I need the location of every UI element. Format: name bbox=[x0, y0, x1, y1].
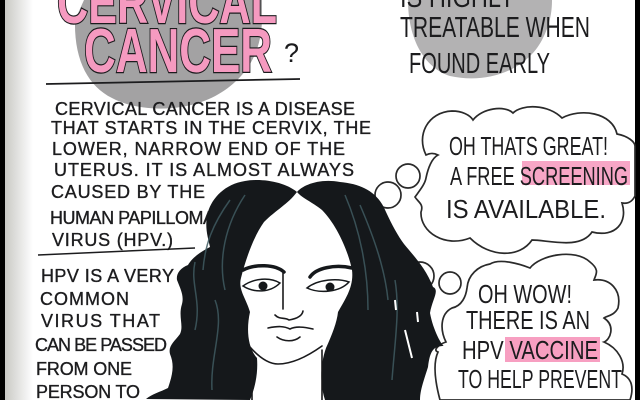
text block: hpv explanation: FROM ONE bbox=[36, 359, 132, 379]
section divider bbox=[38, 248, 195, 255]
callout: treatable when found early bbox=[400, 0, 590, 80]
thought dots: first bubble bbox=[375, 164, 420, 208]
eye: left bbox=[243, 279, 280, 291]
left page edge bbox=[0, 0, 5, 400]
heading underline bbox=[46, 79, 300, 84]
thought bubble: hpv vaccine bbox=[435, 254, 632, 400]
face outline bbox=[250, 346, 322, 400]
highlight: screening bbox=[522, 161, 630, 185]
text block: cervical cancer definition: CAUSED BY THE bbox=[51, 182, 205, 202]
grey callout blob bbox=[408, 0, 552, 78]
nose bbox=[275, 273, 303, 320]
hair bbox=[146, 180, 444, 400]
text block: cervical cancer definition: UTERUS. IT IS ALMOST ALWAYS bbox=[54, 160, 354, 180]
callout: treatable when found early: FOUND EARLY bbox=[409, 48, 550, 80]
question mark: ? bbox=[284, 38, 299, 68]
eyebrow: right bbox=[310, 266, 352, 277]
text block: cervical cancer definition: THAT STARTS IN THE CERVIX, THE bbox=[51, 118, 371, 138]
text block: hpv explanation: COMMON bbox=[40, 289, 129, 309]
text block: cervical cancer definition: LOWER, NARROW END OF THE bbox=[52, 139, 345, 159]
heading: what is cervical cancer bbox=[57, 0, 299, 109]
highlight: vaccine bbox=[505, 337, 600, 362]
illustration: woman with long black hair bbox=[146, 180, 444, 400]
text block: cervical cancer definition: CERVICAL CANCER IS A DISEASE bbox=[55, 99, 355, 119]
title word: cancer: CANCER bbox=[84, 17, 272, 86]
text block: cervical cancer definition: VIRUS (HPV.) bbox=[52, 230, 173, 250]
thought dots: second bubble bbox=[406, 262, 461, 294]
right page edge bbox=[635, 0, 640, 400]
text block: hpv explanation bbox=[35, 266, 174, 400]
text block: cervical cancer definition bbox=[50, 99, 371, 250]
thought bubble: hpv vaccine: THERE IS AN bbox=[466, 305, 590, 335]
text block: hpv explanation: CAN BE PASSED bbox=[35, 335, 167, 355]
eye: right bbox=[307, 280, 349, 292]
eyebrow: left bbox=[243, 266, 284, 272]
neck and shoulders bbox=[252, 345, 322, 400]
text block: hpv explanation: HPV IS A VERY bbox=[41, 266, 174, 286]
thought bubble: hpv vaccine: OH WOW! bbox=[478, 279, 572, 309]
grey heading blob bbox=[75, 0, 262, 109]
text block: cervical cancer definition: HUMAN PAPILLOMA bbox=[50, 208, 215, 228]
mouth bbox=[268, 327, 313, 341]
thought bubble: free screening bbox=[415, 107, 635, 253]
thought bubble: hpv vaccine: HPV VACCINE bbox=[462, 335, 598, 365]
hair highlights bbox=[194, 195, 397, 390]
thought bubble: free screening: IS AVAILABLE. bbox=[446, 194, 606, 224]
hair gaps bbox=[395, 300, 418, 358]
text block: hpv explanation: VIRUS THAT bbox=[41, 311, 160, 331]
